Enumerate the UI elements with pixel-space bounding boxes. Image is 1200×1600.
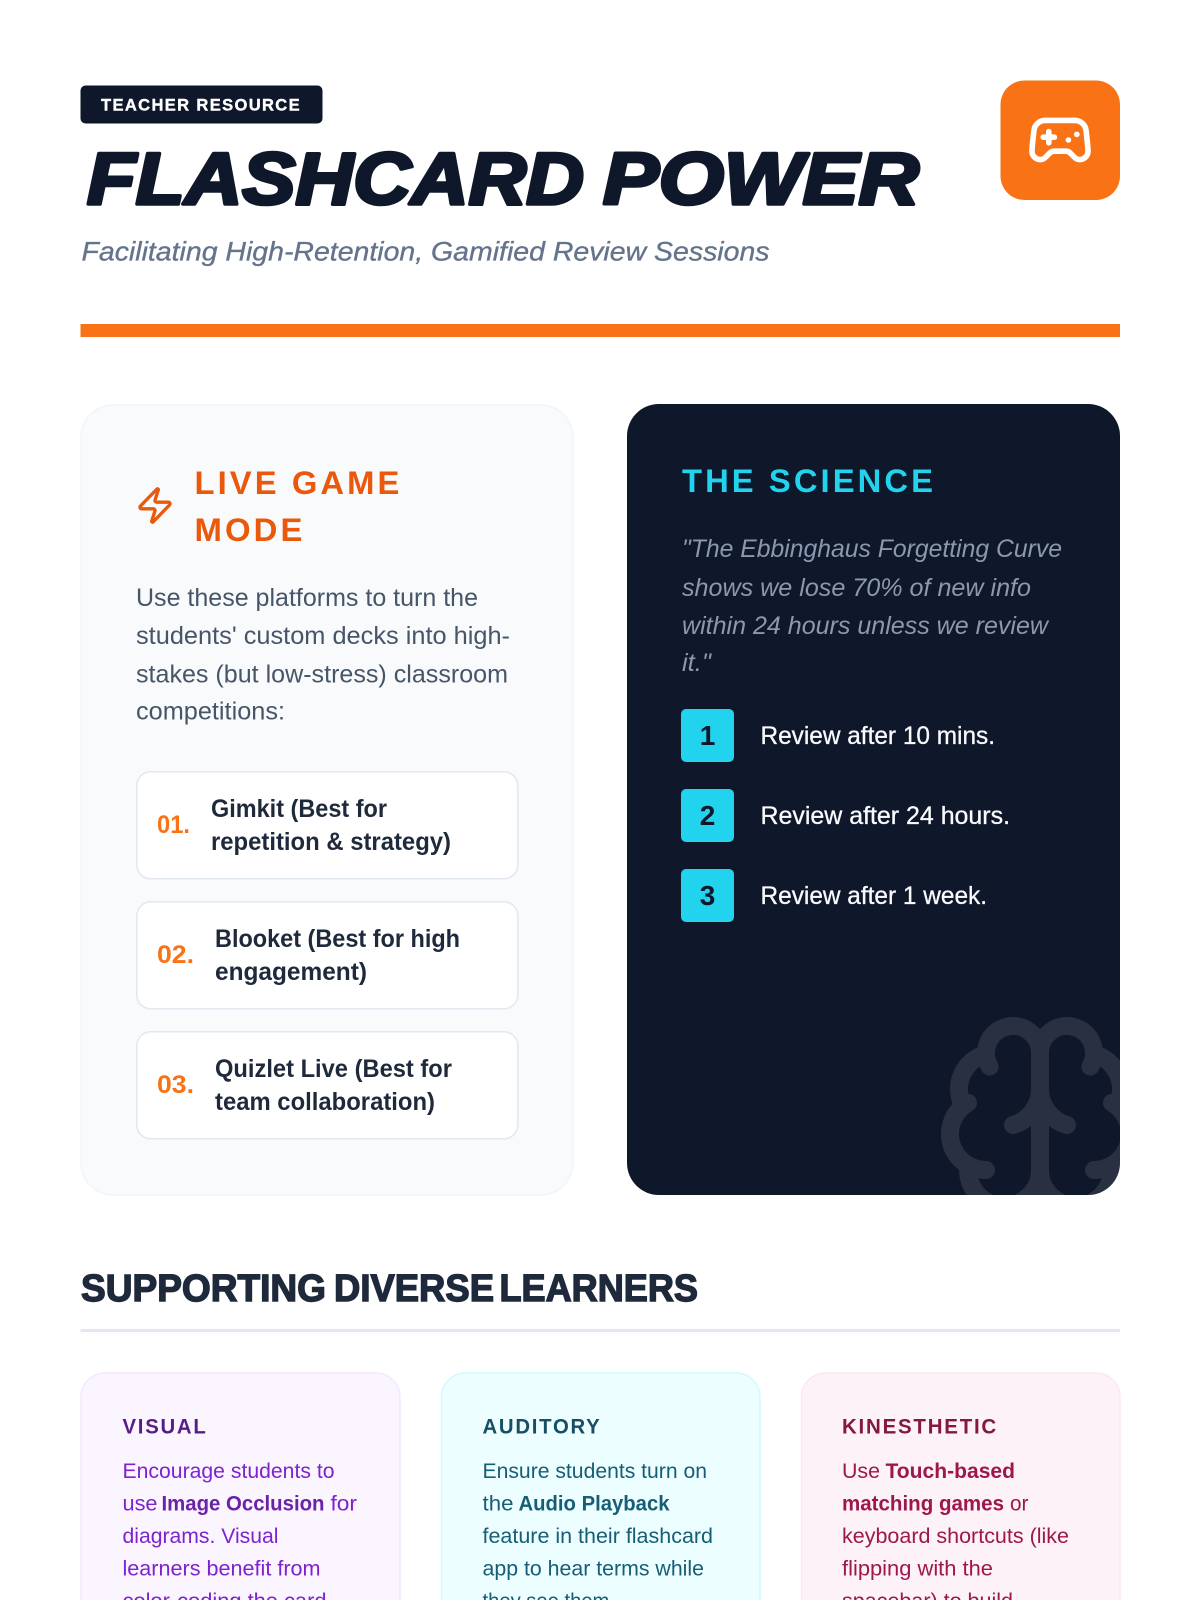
card text: kinesthetic: or — [1010, 1492, 1028, 1516]
card: kinesthetic — [802, 1373, 1120, 1600]
intro paragraph: Use these platforms to turn the — [136, 584, 478, 612]
icon: brain watermark — [950, 1026, 1130, 1206]
list item: Quizlet Live: 03. — [157, 1071, 194, 1099]
step 3 — [681, 869, 987, 922]
card text: auditory: feature in their flashcard — [482, 1525, 713, 1548]
list item: Blooket: 02. — [157, 941, 194, 969]
quote: shows we lose 70% of new info — [682, 574, 1031, 602]
panel: live game mode — [81, 405, 573, 1195]
card text: auditory: Ensure students turn on — [482, 1460, 707, 1483]
card text: visual: diagrams. Visual — [122, 1525, 278, 1548]
quote: within 24 hours unless we review — [682, 612, 1050, 640]
list item: Blooket: Blooket (Best for high — [215, 925, 460, 953]
title — [87, 139, 919, 220]
list item: Quizlet Live: Quizlet Live (Best for — [215, 1055, 452, 1083]
step 1 — [681, 709, 995, 762]
list item: Gimkit: 01. — [157, 811, 190, 839]
title: FLASHCARD — [87, 139, 584, 220]
card text: visual: Image Occlusion — [162, 1492, 324, 1516]
step 1: Review after 10 mins. — [760, 722, 995, 750]
card text: visual — [122, 1460, 357, 1600]
quote — [682, 535, 1062, 677]
card: auditory — [442, 1373, 760, 1600]
intro paragraph: stakes (but low-stress) classroom — [136, 660, 508, 688]
card title: kinesthetic: KINESTHETIC — [842, 1416, 998, 1438]
card text: auditory: app to hear terms while — [482, 1558, 704, 1580]
icon: game controller — [1000, 80, 1120, 200]
heading: live game mode: MODE — [194, 512, 306, 548]
card text: visual: use — [122, 1492, 158, 1516]
card text: kinesthetic: matching games — [842, 1492, 1004, 1516]
list item: Gimkit: repetition & strategy) — [211, 828, 451, 856]
section heading: supporting diverse learners: LEARNERS — [500, 1268, 698, 1310]
panel: the science — [627, 404, 1130, 1206]
intro paragraph — [136, 584, 510, 726]
header — [80, 80, 1120, 337]
card text: auditory: the — [482, 1492, 514, 1516]
section heading: supporting diverse learners: DIVERSE — [334, 1268, 494, 1310]
badge: teacher resource — [80, 86, 322, 124]
step 3: 3 — [700, 880, 715, 911]
title: POWER — [603, 139, 919, 220]
card: visual — [81, 1373, 400, 1600]
card text: kinesthetic — [842, 1460, 1069, 1600]
step 1: 1 — [700, 720, 715, 751]
card text: visual: for — [330, 1492, 357, 1516]
list item: Quizlet Live: team collaboration) — [215, 1088, 435, 1116]
list item: Blooket — [137, 902, 518, 1009]
step 2 — [681, 789, 1010, 842]
quote: it." — [682, 649, 712, 677]
list item: Gimkit: Gimkit (Best for — [211, 795, 387, 823]
step 3: Review after 1 week. — [760, 882, 987, 910]
step 2: 2 — [700, 800, 715, 831]
subtitle: Facilitating High-Retention, Gamified Review Sessions — [82, 236, 770, 266]
icon: lightning bolt — [140, 489, 170, 522]
list item: Blooket: engagement) — [215, 958, 367, 986]
card text: kinesthetic: Touch-based — [886, 1460, 1015, 1483]
heading: live game mode — [194, 465, 402, 548]
card text: visual: Encourage students to — [122, 1460, 334, 1483]
heading: the science: THE SCIENCE — [682, 463, 936, 499]
intro paragraph: competitions: — [136, 698, 285, 726]
badge: teacher resource: TEACHER RESOURCE — [101, 96, 301, 114]
card text: kinesthetic: Use — [842, 1460, 880, 1483]
section heading: supporting diverse learners — [81, 1268, 698, 1310]
heading: live game mode: LIVE GAME — [194, 465, 402, 501]
card text: auditory — [482, 1460, 713, 1600]
card text: kinesthetic: keyboard shortcuts (like — [842, 1525, 1069, 1548]
card text: kinesthetic: flipping with the — [842, 1558, 993, 1580]
list item: Quizlet Live — [137, 1032, 518, 1139]
card text: visual: learners benefit from — [122, 1558, 320, 1580]
list item: Gimkit — [137, 772, 518, 879]
card text: auditory: Audio Playback — [518, 1492, 670, 1516]
step 2: Review after 24 hours. — [760, 802, 1010, 830]
quote: "The Ebbinghaus Forgetting Curve — [682, 535, 1062, 563]
section heading: supporting diverse learners: SUPPORTING — [81, 1268, 326, 1310]
intro paragraph: students' custom decks into high- — [136, 622, 510, 650]
card title: visual: VISUAL — [122, 1416, 208, 1438]
card title: auditory: AUDITORY — [482, 1416, 602, 1438]
